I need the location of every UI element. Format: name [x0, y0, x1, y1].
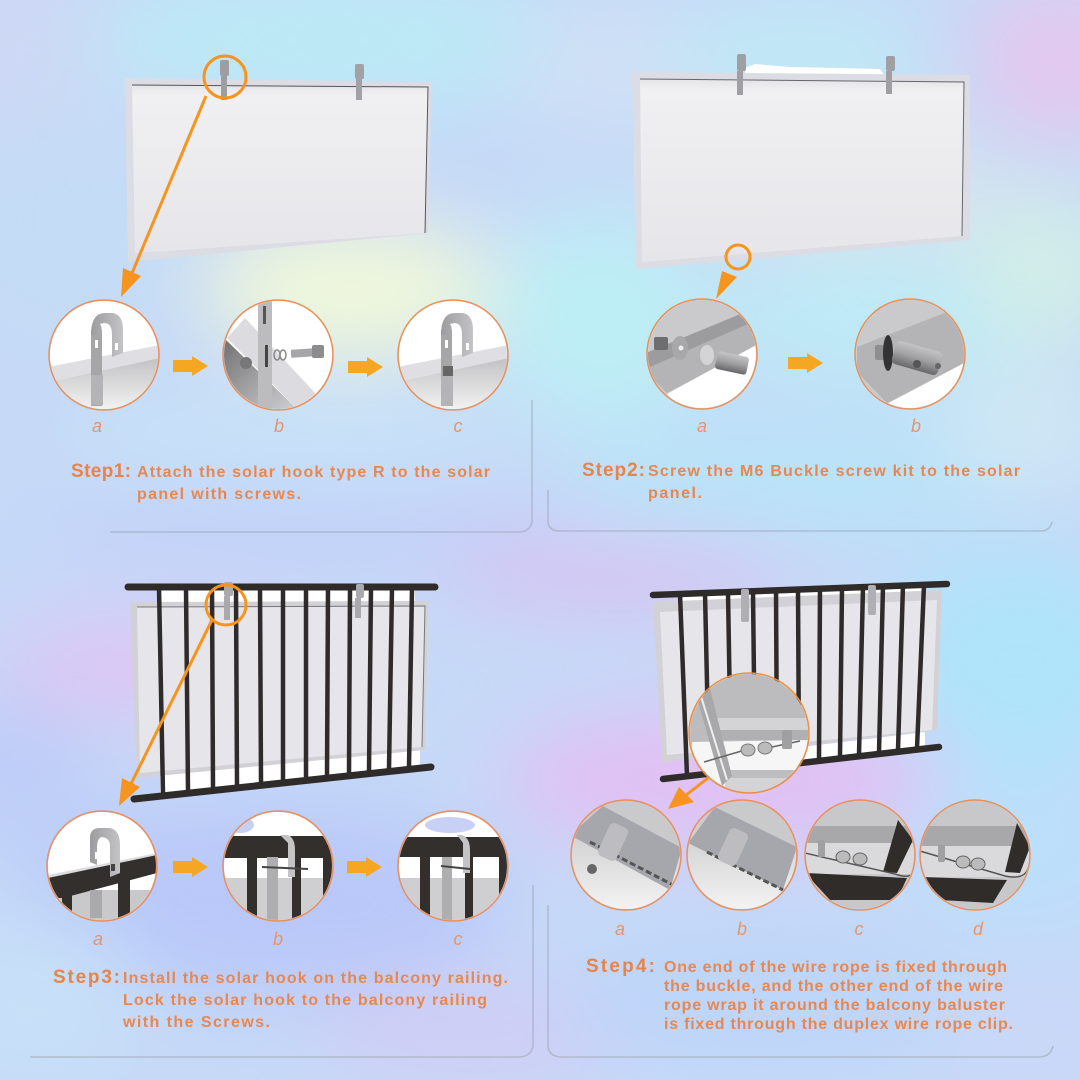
pointer head	[119, 778, 140, 806]
step 4 sub-labels: d	[973, 919, 984, 939]
highlight ring	[204, 56, 246, 98]
white strip behind top rail	[680, 586, 925, 606]
step 1 detail a: hook on frame	[48, 300, 160, 412]
step 1 solar panel illustration	[125, 60, 432, 262]
step 2 solar panel illustration	[632, 54, 970, 269]
arrow: step 2 a to b	[788, 353, 823, 373]
step 3 detail b: screw into hook on rail	[222, 810, 334, 922]
step 4 instruction text	[586, 956, 1013, 1033]
step 1 instruction text: Step1:	[71, 461, 131, 482]
solar panel back sheet	[137, 606, 425, 773]
highlight ring	[726, 245, 750, 269]
white strip behind top rail	[160, 590, 415, 604]
hook right	[868, 585, 876, 615]
white strip above bottom rail	[760, 732, 925, 768]
step 2 detail a: buckle screw parts	[646, 298, 758, 410]
step 4 pointer arrow	[668, 778, 708, 809]
solar panel back sheet	[640, 79, 964, 262]
step 2 instruction text	[582, 460, 1020, 502]
mounting hook right	[355, 64, 364, 100]
step 2 sub-labels: b	[911, 416, 921, 436]
solar panel frame	[653, 590, 942, 762]
step 1 instruction text: Attach the solar hook type R to the solar	[137, 464, 490, 481]
step 4 sub-labels: b	[737, 919, 747, 939]
railing top bar	[128, 584, 435, 590]
step 3 instruction text: with the Screws.	[122, 1014, 270, 1031]
step 1 instruction text: panel with screws.	[137, 486, 301, 503]
step 1 sub-labels: b	[274, 416, 284, 436]
step 1 callout circle and arrow	[121, 56, 246, 297]
step 3 detail a: hook on rail	[46, 810, 160, 922]
step 2 instruction text: Step2:	[582, 460, 645, 481]
step 3 sub-labels	[93, 929, 462, 949]
solar panel frame	[125, 78, 432, 262]
hook left	[224, 582, 233, 620]
solar panel back sheet	[660, 600, 937, 755]
step 1 detail c: fitted hook	[397, 300, 509, 412]
step 4 instruction text: is fixed through the duplex wire rope clip.	[664, 1016, 1013, 1033]
step 2 callout circle and arrow	[716, 245, 750, 299]
white strip above bottom rail	[160, 748, 420, 795]
step 1 sub-labels: c	[454, 416, 462, 436]
step 2 sub-labels: a	[697, 416, 707, 436]
mounting hook left	[220, 60, 229, 100]
step 4 instruction text: rope wrap it around the balcony baluster	[664, 997, 1005, 1014]
solar panel frame	[632, 72, 970, 269]
arrow: step 3 b to c	[347, 857, 382, 877]
railing balusters	[680, 585, 924, 776]
hook left	[741, 589, 749, 622]
step 3 panel and railing illustration	[128, 582, 435, 799]
hook right	[355, 584, 364, 618]
step 4 detail a: bolt and wire rope	[570, 800, 682, 912]
panel outline: step 1	[110, 400, 532, 532]
step 4 detail b: bolt tightened on wire rope	[686, 800, 798, 912]
step 3 instruction text: Lock the solar hook to the balcony railing	[123, 992, 487, 1009]
mounting hook left	[737, 54, 746, 95]
panel outline: step 3	[30, 885, 533, 1057]
pointer line	[130, 96, 206, 278]
step 4 sub-labels	[615, 919, 984, 939]
panel outline: step 2	[548, 490, 1052, 531]
step 1 sub-labels	[92, 416, 462, 436]
step 4 panel and railing illustration	[653, 584, 947, 779]
solar panel frame	[130, 601, 428, 778]
step 3 instruction text	[53, 967, 508, 1031]
panel inner edge shadow	[132, 85, 428, 233]
pointer line	[128, 620, 212, 790]
step 3 instruction text: Step3:	[53, 967, 120, 988]
step 4 zoom detail circle	[689, 672, 810, 794]
panel inner edge shadow	[640, 79, 964, 236]
step 3 detail c: locked hook on rail	[397, 810, 509, 922]
step 2 detail b: fitted buckle screw	[854, 298, 966, 410]
step 3 sub-labels: c	[454, 929, 462, 949]
step 1 instruction text	[71, 461, 490, 503]
step 2 instruction text: Screw the M6 Buckle screw kit to the solar	[648, 463, 1020, 480]
white halo above frame	[745, 64, 885, 76]
step 3 callout circle and arrow	[119, 585, 246, 806]
step 4 instruction text: Step4:	[586, 956, 655, 977]
panel outline: step 4	[548, 905, 1053, 1057]
step 1 sub-labels: a	[92, 416, 102, 436]
arrow: step 1 a to b	[173, 356, 208, 376]
railing bottom bar	[663, 747, 939, 779]
step 2 sub-labels	[697, 416, 921, 436]
pointer line	[685, 778, 708, 796]
pointer head	[716, 271, 737, 299]
step 4 sub-labels: a	[615, 919, 625, 939]
arrow: step 3 a to b	[173, 857, 208, 877]
step 4 detail d: rope wrapped around baluster	[920, 800, 1032, 912]
arrow: step 1 b to c	[348, 357, 383, 377]
step 2 instruction text: panel.	[648, 485, 702, 502]
mounting hook right	[886, 56, 895, 94]
step 3 sub-labels: a	[93, 929, 103, 949]
solar panel back sheet	[132, 85, 428, 253]
panel inner edge shadow	[137, 606, 425, 747]
railing balusters	[159, 588, 412, 794]
step 1 detail b: bolt and hook	[222, 300, 334, 412]
step 4 detail c: duplex wire rope clip	[805, 800, 917, 912]
step 3 instruction text: Install the solar hook on the balcony railing.	[123, 970, 508, 987]
step 3 sub-labels: b	[273, 929, 283, 949]
railing top bar	[653, 584, 947, 595]
step 4 instruction text: the buckle, and the other end of the wire	[664, 978, 1003, 995]
step 4 sub-labels: c	[854, 919, 864, 939]
railing bottom bar	[134, 767, 431, 799]
pointer head	[121, 268, 141, 297]
pointer head	[668, 787, 694, 809]
highlight ring	[206, 585, 246, 625]
step 4 instruction text: One end of the wire rope is fixed through	[664, 959, 1007, 976]
